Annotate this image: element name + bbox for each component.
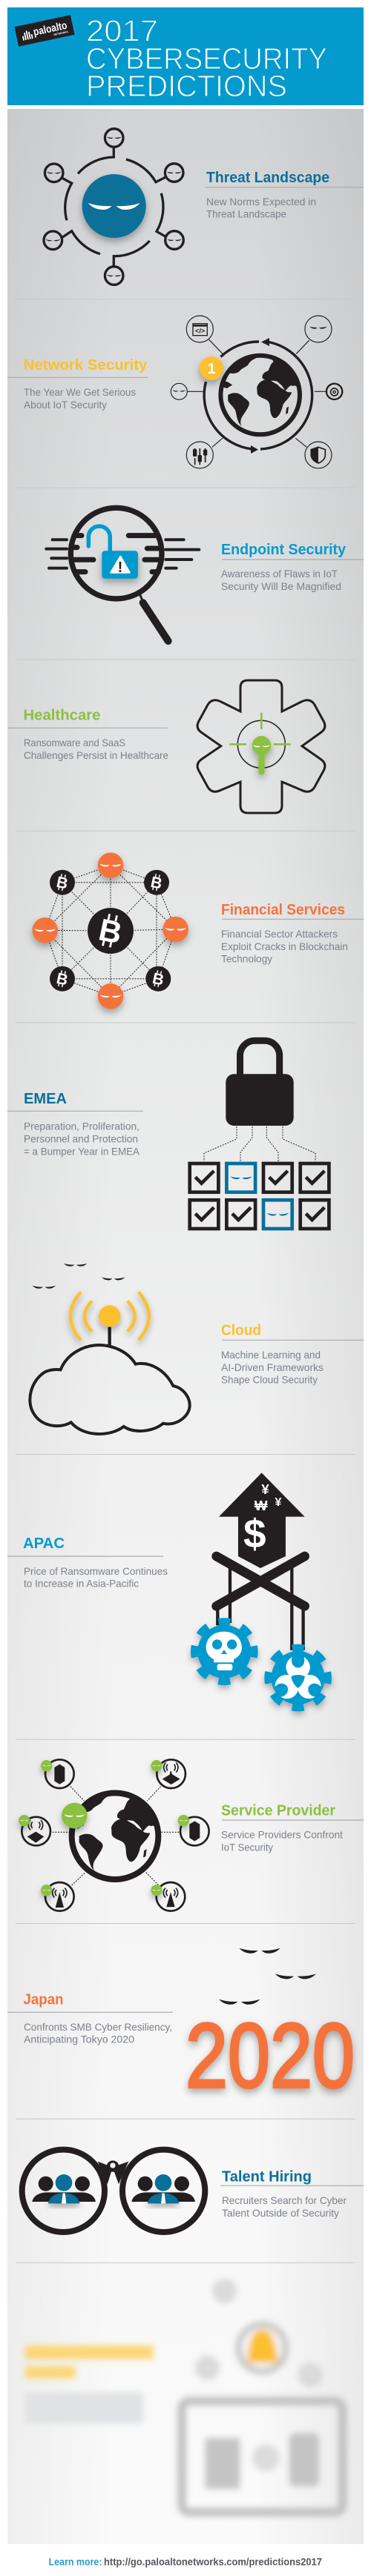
- text block: Awareness of Flaws in IoT: [221, 568, 338, 580]
- icon: bitcoin blockchain network: B: [55, 970, 70, 989]
- panel: blurred final section: [24, 2279, 343, 2512]
- text block: [206, 196, 316, 220]
- text block: Shape Cloud Security: [221, 1375, 318, 1386]
- icon: infected globe and devices: [19, 1759, 209, 1911]
- title: 2017: [86, 13, 158, 47]
- icon: bitcoin blockchain network: B: [151, 970, 165, 989]
- title: PREDICTIONS: [86, 69, 287, 103]
- icon: magnifier over open lock: !: [118, 560, 122, 576]
- panel: talent hiring: [22, 2150, 364, 2232]
- text block: Talent Outside of Security: [222, 2208, 339, 2219]
- panel: service provider: [19, 1759, 364, 1911]
- text block: [221, 929, 348, 965]
- text block: Exploit Cracks in Blockchain: [221, 941, 348, 952]
- heading: Healthcare: [24, 708, 101, 724]
- text block: Preparation, Proliferation,: [24, 1121, 139, 1132]
- heading: Talent Hiring: [222, 2168, 312, 2185]
- icon: ransom arrow, crossbones and gears: [195, 1473, 327, 1707]
- text block: Security Will Be Magnified: [221, 581, 341, 592]
- icon: globe with security ring: [171, 316, 342, 468]
- footer link: http://go.paloaltonetworks.com/predictions2017: [104, 2557, 322, 2569]
- icon: ransom arrow, crossbones and gears: ₩: [255, 1498, 268, 1513]
- text block: Threat Landscape: [206, 209, 286, 220]
- text block: Personnel and Protection: [24, 1133, 138, 1144]
- icon: ransom arrow, crossbones and gears: $: [243, 1510, 266, 1556]
- text block: [24, 2022, 172, 2045]
- text block: The Year We Get Serious: [24, 387, 136, 398]
- blurred text block: [24, 2392, 143, 2423]
- icon: star of life with target: [197, 680, 325, 813]
- text block: [24, 1121, 140, 1157]
- text block: About IoT Security: [24, 399, 107, 411]
- text block: IoT Security: [221, 1842, 273, 1853]
- icon: skull gear: [195, 1622, 254, 1681]
- text block: = a Bumper Year in EMEA: [24, 1146, 140, 1157]
- panel: financial services: [32, 852, 364, 1009]
- text block: Anticipating Tokyo 2020: [24, 2034, 134, 2045]
- panel: healthcare: [7, 680, 325, 813]
- text block: Technology: [221, 954, 272, 965]
- heading: Financial Services: [221, 902, 345, 918]
- icon: left people: [32, 2174, 96, 2203]
- heading: Service Provider: [221, 1802, 335, 1819]
- text block: Service Providers Confront: [221, 1829, 343, 1840]
- text block: [24, 1566, 168, 1590]
- text block: Price of Ransomware Continues: [24, 1566, 168, 1577]
- icon: bitcoin blockchain network: B: [96, 912, 125, 951]
- text block: [221, 568, 341, 592]
- icon: binoculars with people: [22, 2150, 205, 2232]
- text block: Machine Learning and: [221, 1350, 321, 1361]
- text block: to Increase in Asia-Pacific: [24, 1579, 139, 1590]
- panel: APAC: [7, 1473, 327, 1707]
- text block: [221, 1829, 343, 1853]
- icon: bitcoin blockchain network: B: [55, 874, 70, 893]
- panel: Japan: [7, 1948, 355, 2108]
- icon: right people: [131, 2174, 195, 2203]
- panel: network security: [7, 316, 342, 468]
- text block: New Norms Expected in: [206, 196, 316, 208]
- panel: threat landscape: [44, 129, 364, 285]
- panel: cloud: [30, 1264, 364, 1434]
- text block: Challenges Persist in Healthcare: [24, 750, 168, 761]
- logo: Palo Alto Networks: [15, 15, 74, 47]
- icon: hacker network: [44, 129, 183, 285]
- icon: ransom arrow, crossbones and gears: ¥: [261, 1481, 269, 1497]
- text block: Confronts SMB Cyber Resiliency,: [24, 2022, 172, 2033]
- icon: number one badge: [200, 356, 223, 380]
- icon: biohazard gear: [269, 1648, 327, 1707]
- icon: magnifier over open lock: [46, 508, 199, 641]
- text block: [24, 737, 168, 761]
- icon: watching eyes: [219, 1948, 316, 2005]
- panel: endpoint security: [46, 508, 364, 641]
- heading: Cloud: [221, 1323, 261, 1339]
- text block: Recruiters Search for Cyber: [222, 2195, 347, 2206]
- icon: bitcoin blockchain network: B: [149, 874, 164, 893]
- heading: Endpoint Security: [221, 542, 347, 558]
- icon: ransom arrow, crossbones and gears: ¥: [275, 1496, 282, 1509]
- panel: EMEA: [7, 1040, 329, 1229]
- heading: Network Security: [24, 357, 148, 374]
- icon: number one badge: 1: [207, 361, 216, 377]
- blurred icon: [182, 2279, 343, 2512]
- title: CYBERSECURITY: [86, 42, 327, 76]
- header banner: [7, 7, 364, 105]
- title: [86, 13, 327, 103]
- footer link: Learn more:: [49, 2557, 102, 2569]
- text block: [222, 2195, 347, 2219]
- logo: Palo Alto Networks: paloalto: [33, 20, 68, 39]
- heading: APAC: [23, 1536, 65, 1552]
- text block: AI-Driven Frameworks: [221, 1362, 324, 1373]
- icon: padlock with checkboxes: [190, 1040, 329, 1229]
- icon: bitcoin blockchain network: [32, 852, 188, 1009]
- heading: Threat Landscape: [206, 170, 329, 186]
- heading: EMEA: [24, 1091, 67, 1107]
- logo: Palo Alto Networks: NETWORKS: [53, 30, 69, 36]
- heading: Japan: [24, 1991, 64, 2008]
- text block: [24, 387, 136, 411]
- icon: cloud with antenna signal: [30, 1264, 190, 1434]
- blurred heading: [24, 2346, 154, 2378]
- text block: Financial Sector Attackers: [221, 929, 338, 940]
- text block: Ransomware and SaaS: [24, 737, 125, 748]
- icon: globe with security ring: </>: [195, 328, 206, 335]
- text block: [221, 1350, 324, 1386]
